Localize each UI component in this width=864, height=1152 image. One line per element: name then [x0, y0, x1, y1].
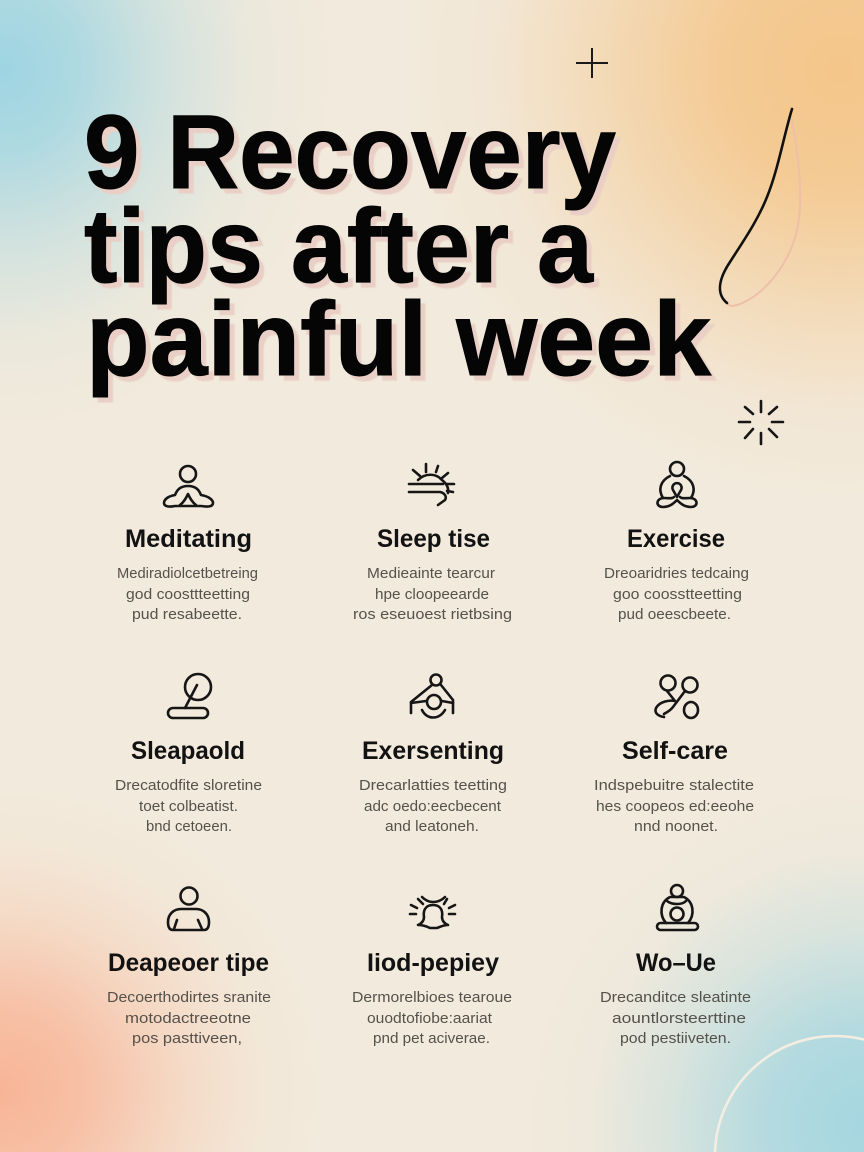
tip 6: Self-care: nnd noonet.: [634, 818, 718, 835]
tip 5: Exersenting: [359, 674, 507, 835]
tip 3: Exercise: Exercise: [627, 525, 725, 553]
tip 3: Exercise: Dreoaridries tedcaing: [604, 565, 749, 582]
tip 2: Sleep tise: Sleep tise: [377, 525, 490, 553]
tip 2: Sleep tise: hpe cloopeearde: [375, 586, 489, 603]
tip 4: Sleapaold: [115, 674, 262, 835]
icon: seated figure on base: [657, 885, 698, 930]
title: 9 Recovery: [84, 94, 616, 211]
tip 7: Deapeoer tipe: [107, 888, 271, 1047]
tip 9: Wo-Ue: pod pestiiveten.: [620, 1030, 731, 1047]
tip 7: Deapeoer tipe: Deapeoer tipe: [108, 949, 269, 977]
icon: circle on stand: [168, 674, 211, 718]
tip 4: Sleapaold: bnd cetoeen.: [146, 818, 232, 835]
tip 9: Wo-Ue: aountlorsteerttine: [612, 1010, 746, 1027]
tip 9: Wo-Ue: [600, 885, 751, 1047]
icon: seated meditation: [164, 466, 213, 507]
tip 4: Sleapaold: Sleapaold: [131, 737, 245, 765]
tip 5: Exersenting: Exersenting: [362, 737, 504, 765]
tip 1: Meditating: god coosttteetting: [126, 586, 250, 603]
icon: figure with roof and circle: [411, 674, 453, 718]
icon: sunrise lines: [409, 464, 454, 505]
icon: plus mark: [576, 48, 608, 78]
tip 7: Deapeoer tipe: pos pasttiveen,: [132, 1030, 242, 1047]
tip 8: Iiod-pepiey: [352, 897, 512, 1047]
tip 6: Self-care: hes coopeos ed:eeohe: [596, 798, 754, 815]
tip 6: Self-care: [594, 676, 754, 835]
tip 9: Wo-Ue: Wo–Ue: [636, 949, 716, 977]
icon: sparkle burst: [739, 401, 783, 444]
title: [84, 94, 712, 398]
tip 1: Meditating: [117, 466, 258, 623]
tip 3: Exercise: [604, 462, 749, 623]
tip 8: Iiod-pepiey: Iiod-pepiey: [367, 949, 499, 977]
tip 3: Exercise: pud oeescbeete.: [618, 606, 731, 623]
tip 5: Exersenting: adc oedo:eecbecent: [364, 798, 502, 815]
icon: linked loops: [655, 676, 698, 718]
tip 8: Iiod-pepiey: ouodtofiobe:aariat: [367, 1010, 493, 1027]
icon: bulb with rays: [410, 897, 455, 928]
tip 8: Iiod-pepiey: pnd pet aciverae.: [373, 1030, 490, 1047]
tip 5: Exersenting: Drecarlatties teetting: [359, 777, 507, 794]
title: painful week: [86, 281, 712, 398]
tip 5: Exersenting: and leatoneh.: [385, 818, 479, 835]
icon: seated figure with drop: [657, 462, 697, 507]
tip 4: Sleapaold: toet colbeatist.: [139, 798, 238, 815]
tip 3: Exercise: goo coosstteetting: [613, 586, 742, 603]
tip 8: Iiod-pepiey: Dermorelbioes tearoue: [352, 989, 512, 1006]
tip 1: Meditating: Meditating: [125, 525, 252, 553]
title: tips after a: [84, 188, 595, 305]
tip 2: Sleep tise: Medieainte tearcur: [367, 565, 495, 582]
tip 6: Self-care: Self-care: [622, 737, 728, 765]
decorative ring: [715, 1036, 864, 1152]
icon: person bust: [168, 888, 209, 930]
tip 4: Sleapaold: Drecatodfite sloretine: [115, 777, 262, 794]
tip 2: Sleep tise: ros eseuoest rietbsing: [353, 606, 512, 623]
tip 1: Meditating: Mediradiolcetbetreing: [117, 565, 258, 582]
icon: pink and black curve: [720, 109, 800, 306]
tip 9: Wo-Ue: Drecanditce sleatinte: [600, 989, 751, 1006]
tip 7: Deapeoer tipe: motodactreeotne: [125, 1010, 251, 1027]
tip 1: Meditating: pud resabeette.: [132, 606, 242, 623]
tip 7: Deapeoer tipe: Decoerthodirtes sranite: [107, 989, 271, 1006]
tip 2: Sleep tise: [353, 464, 512, 623]
tip 6: Self-care: Indspebuitre stalectite: [594, 777, 754, 794]
